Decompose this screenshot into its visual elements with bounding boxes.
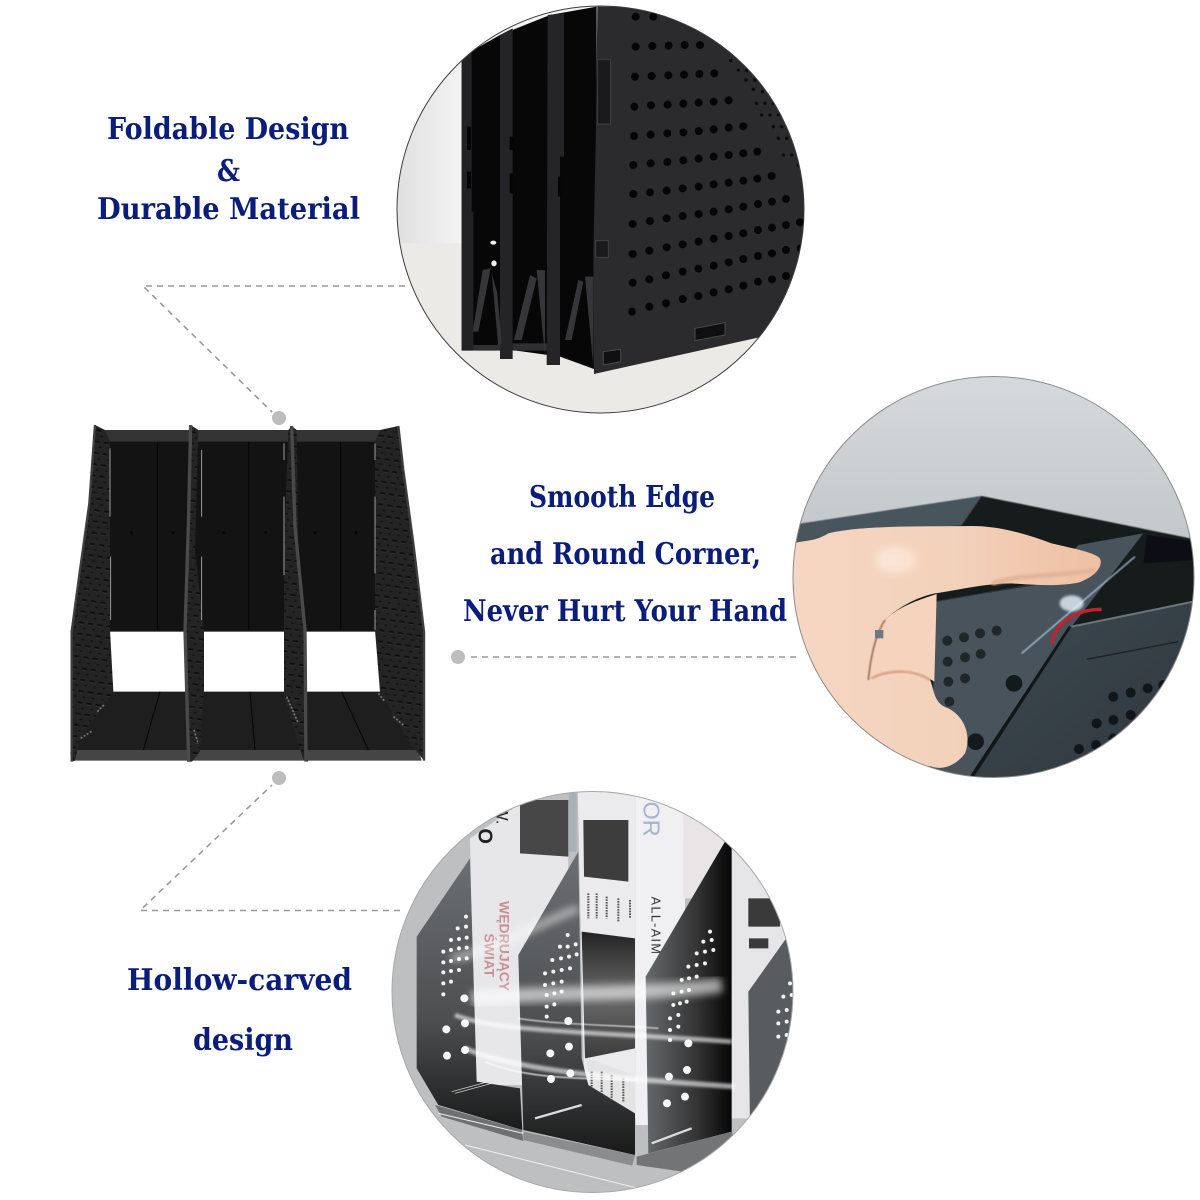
magazines bbox=[470, 790, 798, 1125]
heading: smooth edge and round corner: Smooth Edge bbox=[529, 480, 715, 515]
connector: top callout dashed line bbox=[143, 286, 405, 425]
box interior bbox=[792, 496, 1198, 790]
heading: foldable design and durable material: & bbox=[217, 154, 240, 189]
heading: hollow-carved design: Hollow-carved bbox=[127, 963, 352, 998]
product photo: three-section black file organizer bbox=[70, 425, 424, 762]
photo circle: folded organizer side view bbox=[390, 0, 810, 420]
magazine cover text: O bbox=[473, 828, 495, 844]
connector: middle callout dashed line bbox=[451, 650, 801, 664]
heading: hollow-carved design: design bbox=[193, 1023, 293, 1058]
heading: smooth edge and round corner: and Round Corner, bbox=[490, 537, 761, 572]
heading: foldable design and durable material bbox=[97, 112, 360, 227]
heading: smooth edge and round corner bbox=[463, 480, 787, 629]
circle outline: folded organizer bbox=[397, 6, 804, 413]
photo circle: hollow-carved organizer with magazines bbox=[385, 785, 805, 1200]
magazine cover text: WĘDRUJĄCY bbox=[496, 901, 512, 992]
magazine cover text: W. bbox=[493, 805, 512, 824]
airflow streaks bbox=[452, 908, 735, 1087]
organizer panels with holes bbox=[417, 842, 793, 1188]
photo circle: finger touching rounded edge bbox=[785, 370, 1200, 790]
photo background: wall and floor bbox=[398, 7, 758, 412]
photo background: grey wall bbox=[800, 377, 1190, 539]
side panel with holes bbox=[932, 533, 1143, 780]
circle outline: finger photo bbox=[793, 376, 1194, 778]
folded dividers bbox=[462, 7, 597, 370]
circle outline: hollow-carved photo bbox=[392, 792, 793, 1192]
heading: foldable design and durable material: Foldable Design bbox=[107, 112, 349, 147]
highlight streak and red arc bbox=[1022, 557, 1135, 653]
magazine cover text: OR bbox=[638, 802, 664, 837]
front panel with perforations bbox=[593, 7, 810, 374]
magazine cover text: ŚWIAT bbox=[481, 933, 498, 978]
hand bbox=[793, 526, 1101, 768]
magazine cover text bbox=[473, 802, 664, 992]
heading: hollow-carved design bbox=[127, 963, 352, 1058]
heading: foldable design and durable material: Durable Material bbox=[97, 192, 360, 227]
photo background bbox=[392, 792, 748, 1192]
connector: bottom callout dashed line bbox=[140, 771, 400, 910]
front panel with holes bbox=[970, 602, 1197, 783]
heading: smooth edge and round corner: Never Hurt Your Hand bbox=[463, 594, 787, 629]
magazine cover text: ALL-AIM bbox=[649, 897, 663, 955]
